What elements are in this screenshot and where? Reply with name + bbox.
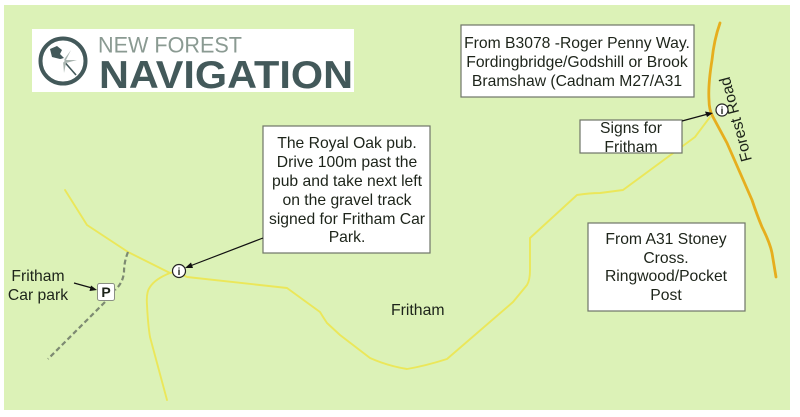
callout: B3078 directions: Bramshaw (Cadnam M27/A31 (472, 73, 682, 90)
arrow: car park label to P (74, 283, 97, 291)
callout: Royal Oak pub (263, 126, 430, 253)
icon: info at Forest Road: i (721, 106, 724, 117)
label: Fritham Car park: Car park (8, 287, 68, 304)
road: Forest Road (709, 23, 776, 277)
label: Fritham Car park (8, 268, 68, 304)
callout: Royal Oak pub: Park. (329, 229, 365, 246)
callout: Royal Oak pub: signed for Fritham Car (269, 211, 425, 228)
callout: A31 directions (588, 223, 745, 311)
road: gravel track (48, 252, 128, 359)
icon: info at Forest Road (716, 104, 728, 117)
label: Forest Road: Forest Road (717, 75, 756, 163)
callout: A31 directions: Cross. (643, 250, 689, 267)
callout: B3078 directions: From B3078 -Roger Penny Way. (464, 35, 690, 52)
callout: B3078 directions (461, 25, 694, 97)
callout: signs for Fritham (580, 120, 682, 156)
icon: info at pub (172, 264, 186, 278)
callout: signs for Fritham: Signs for (600, 120, 662, 137)
arrow: signs to junction (682, 112, 713, 121)
callout: A31 directions: Post (650, 287, 682, 304)
callout: Royal Oak pub: on the gravel track (282, 192, 412, 209)
callout: Royal Oak pub: The Royal Oak pub. (277, 135, 417, 152)
icon: compass (40, 38, 86, 84)
callout: B3078 directions: Fordingbridge/Godshill or Brook (466, 54, 688, 71)
logo text: NEW FOREST: NEW FOREST (98, 32, 242, 58)
label: Fritham Car park: Fritham (11, 268, 65, 285)
callout: A31 directions: From A31 Stoney (605, 231, 727, 248)
callout: signs for Fritham: Fritham (604, 139, 658, 156)
callout: Royal Oak pub: Drive 100m past the (277, 154, 417, 171)
logo (32, 29, 354, 97)
label: Fritham: Fritham (391, 302, 445, 319)
logo text: NAVIGATION: NAVIGATION (99, 54, 353, 97)
road: Fritham lane (65, 117, 710, 400)
icon: info at pub: i (178, 267, 181, 278)
callout: A31 directions: Ringwood/Pocket (605, 268, 728, 285)
arrow: pub callout to junction (185, 238, 263, 268)
icon: parking (98, 284, 114, 300)
icon: parking: P (101, 284, 111, 300)
callout: Royal Oak pub: pub and take next left (272, 173, 423, 190)
